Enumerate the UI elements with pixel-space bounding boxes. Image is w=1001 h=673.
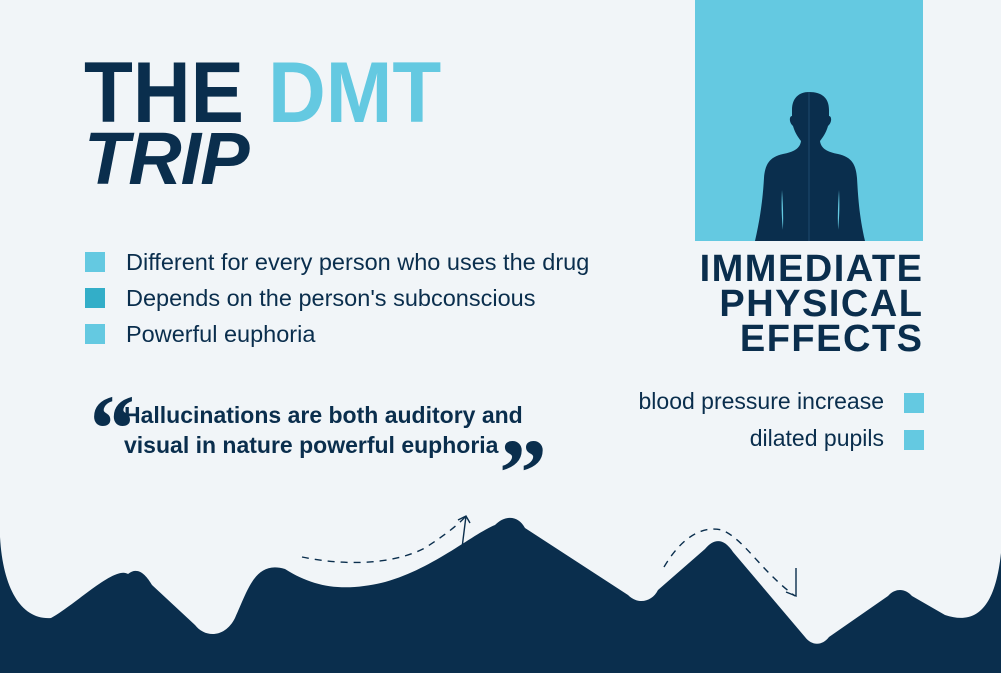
bullet 3: Powerful euphoria (126, 321, 315, 347)
quote mark close: ” (499, 419, 547, 526)
effects list (639, 388, 924, 451)
image panel: body silhouette (695, 0, 923, 241)
effect 1: blood pressure increase (639, 388, 884, 414)
title line 1: THE DMT (84, 45, 441, 141)
bullet list (85, 249, 589, 347)
title (84, 45, 441, 200)
bullet 1: Different for every person who uses the drug (126, 249, 589, 275)
arrow 1 (302, 516, 470, 562)
heading: immediate physical effects: PHYSICAL (719, 283, 924, 325)
quote mark open: “ (85, 375, 133, 482)
heading: immediate physical effects: IMMEDIATE (700, 248, 924, 290)
quote text: visual in nature powerful euphoria (124, 432, 498, 458)
quote (85, 375, 547, 526)
arrow 2 (664, 529, 796, 596)
quote text: Hallucinations are both auditory and (124, 402, 523, 428)
quote text (124, 402, 523, 458)
icon: human silhouette (755, 92, 865, 241)
heading: immediate physical effects (700, 248, 924, 360)
heading: immediate physical effects: EFFECTS (740, 318, 924, 360)
bullet 2: Depends on the person's subconscious (126, 285, 535, 311)
effect 2: dilated pupils (750, 425, 884, 451)
title line 2: TRIP (84, 117, 249, 200)
